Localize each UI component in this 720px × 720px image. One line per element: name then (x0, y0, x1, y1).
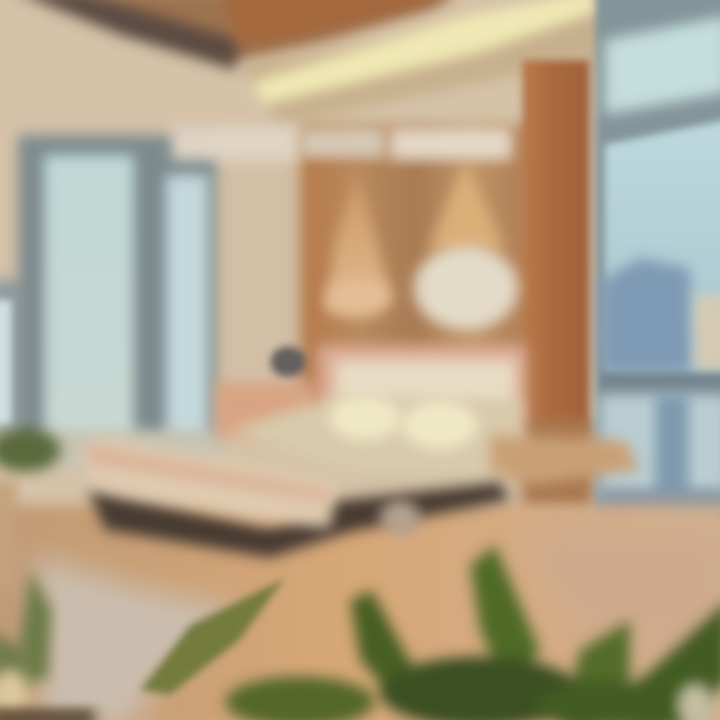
bed: pillows and duvet (230, 395, 525, 480)
wood feature wall (300, 60, 594, 510)
bedside table (490, 435, 640, 485)
pendant lamp left (326, 175, 392, 318)
headboard (215, 345, 526, 437)
right window (595, 0, 720, 520)
pendant lamp right (414, 160, 518, 330)
ceiling: dark beam and wood panel (15, 0, 460, 70)
suspended white light bar (172, 126, 512, 160)
plant: left side (0, 428, 95, 720)
bedside lamp (270, 346, 306, 378)
bed base dark shadow (88, 482, 510, 558)
floor (0, 505, 720, 720)
plant: foreground leaves (140, 545, 720, 720)
left window (0, 135, 220, 470)
bench (82, 438, 335, 528)
railing (600, 372, 720, 392)
city buildings (602, 258, 692, 372)
ceiling: light strip (240, 0, 720, 125)
bed leg highlight (380, 500, 420, 536)
